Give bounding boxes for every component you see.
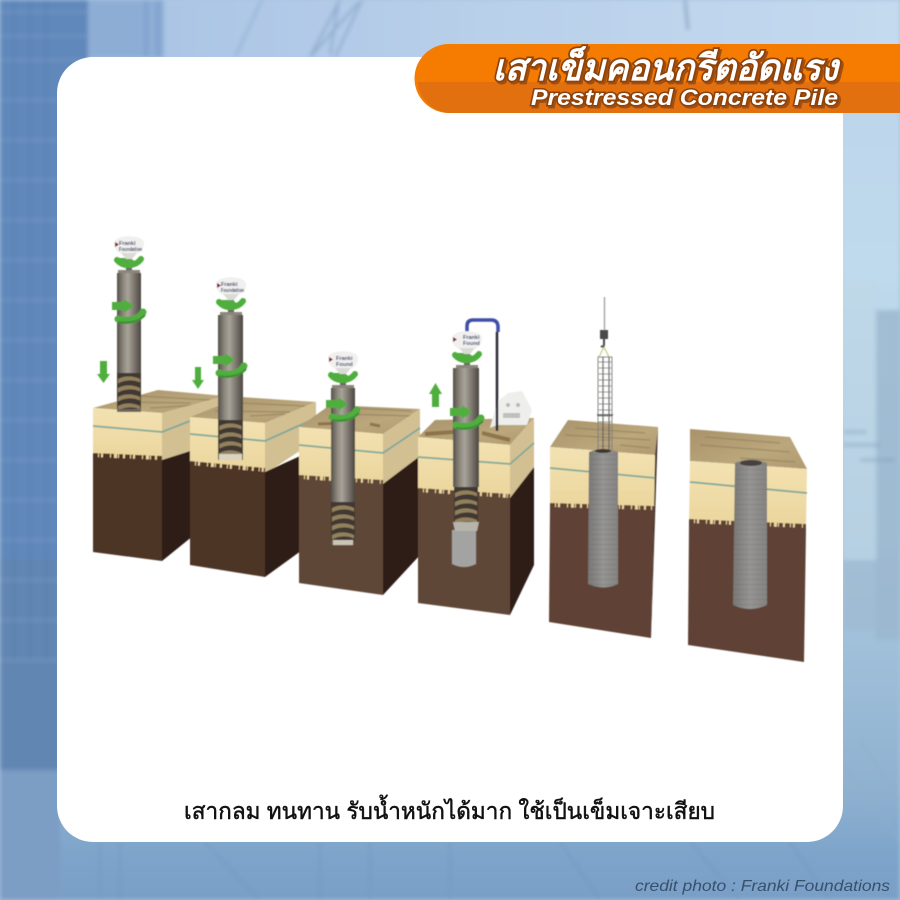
panel: white card	[57, 57, 843, 842]
credit line: credit photo : Franki Foundations	[635, 878, 890, 895]
tool 2: rotary auger drilling	[213, 277, 246, 460]
block 2: soil with auger part way	[190, 397, 316, 577]
icon: white pump machine	[490, 391, 532, 428]
block 6: soil with finished pile	[688, 429, 807, 662]
tool 2: rotary auger drilling: Franki	[221, 282, 238, 288]
tool 4: auger with concrete hose: Franki	[463, 335, 480, 341]
finished concrete pile	[733, 460, 767, 609]
diagram: pile construction sequence	[93, 236, 807, 662]
caption: เสากลม ทนทาน รับน้ำหนักได้มาก ใช้เป็นเข็มเจาะเสียบ	[184, 795, 715, 824]
arrow: down, step 2	[192, 367, 204, 389]
title banner	[414, 44, 900, 113]
heading: English title: Prestressed Concrete Pile	[531, 85, 838, 110]
arrow: down, step 1	[97, 361, 110, 383]
tool 3: rotary auger at full depth	[326, 351, 359, 545]
block 4: soil with auger withdrawing and concrete	[418, 418, 534, 615]
tool 2: rotary auger drilling: Foundation	[221, 288, 244, 294]
rebar cage lowered by crane hook	[597, 297, 613, 452]
tool 1: rotary auger above ground	[112, 236, 145, 412]
tool 4: auger with concrete hose	[450, 320, 498, 531]
tool 3: rotary auger at full depth: Found	[336, 362, 353, 368]
arrow: up, step 4	[429, 383, 442, 407]
block 5: soil with concrete pile and cage	[549, 420, 658, 638]
banner shape	[414, 44, 900, 113]
concrete pile in block 5	[588, 449, 618, 588]
block 3: soil with auger at depth	[299, 405, 420, 595]
tool 1: rotary auger above ground: Foundation	[119, 247, 142, 253]
heading: Thai title: เสาเข็มคอนกรีตอัดแรง	[493, 46, 841, 88]
tool 3: rotary auger at full depth: Franki	[336, 356, 353, 362]
block 1: soil with auger entering	[93, 390, 225, 561]
tool 1: rotary auger above ground: Franki	[119, 241, 136, 247]
tool 4: auger with concrete hose: Found	[463, 341, 480, 347]
concrete pour below tool 4	[452, 530, 476, 567]
